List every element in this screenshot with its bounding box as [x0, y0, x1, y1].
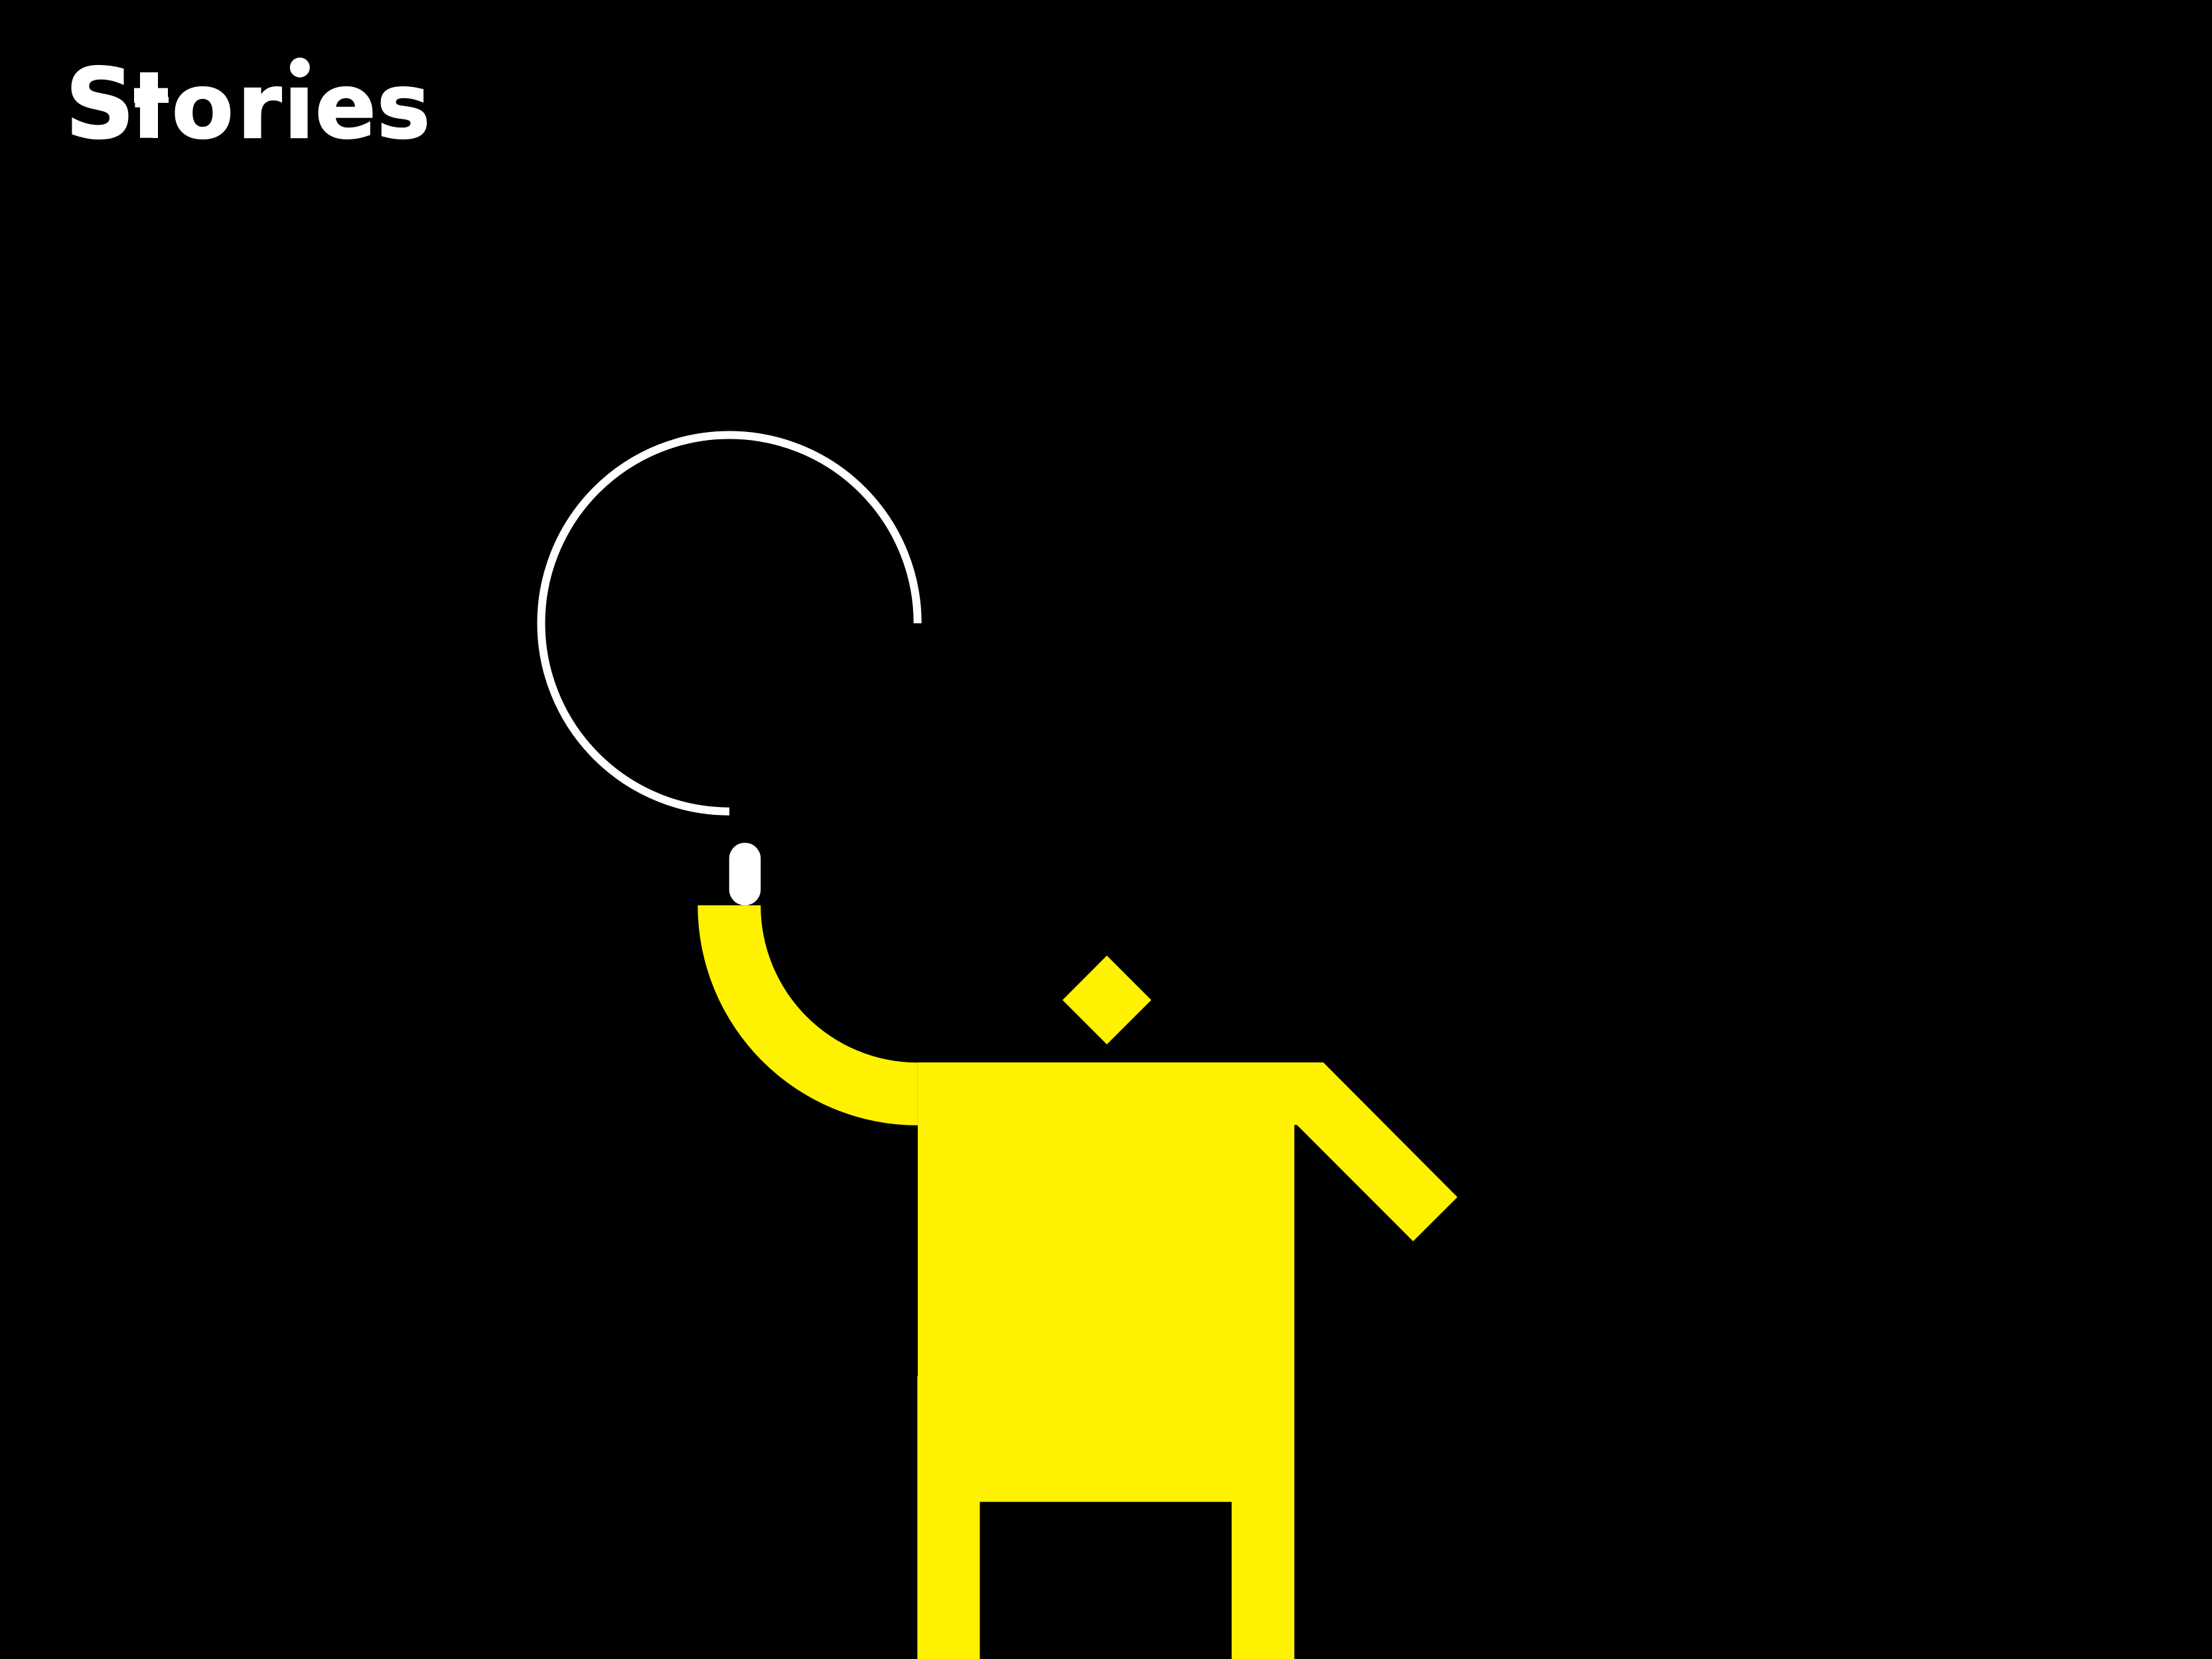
white pill held in the hand — [729, 843, 761, 905]
figure raised arm: curved — [698, 905, 918, 1125]
figure: yellow person — [698, 905, 1457, 1659]
figure lowered arm: diagonal — [1293, 1062, 1457, 1241]
thought bubble: open white circle arc — [541, 435, 918, 812]
figure torso and legs — [917, 1062, 1294, 1659]
figure head: diamond — [1063, 956, 1151, 1045]
title: Stories: Stories — [65, 48, 431, 161]
